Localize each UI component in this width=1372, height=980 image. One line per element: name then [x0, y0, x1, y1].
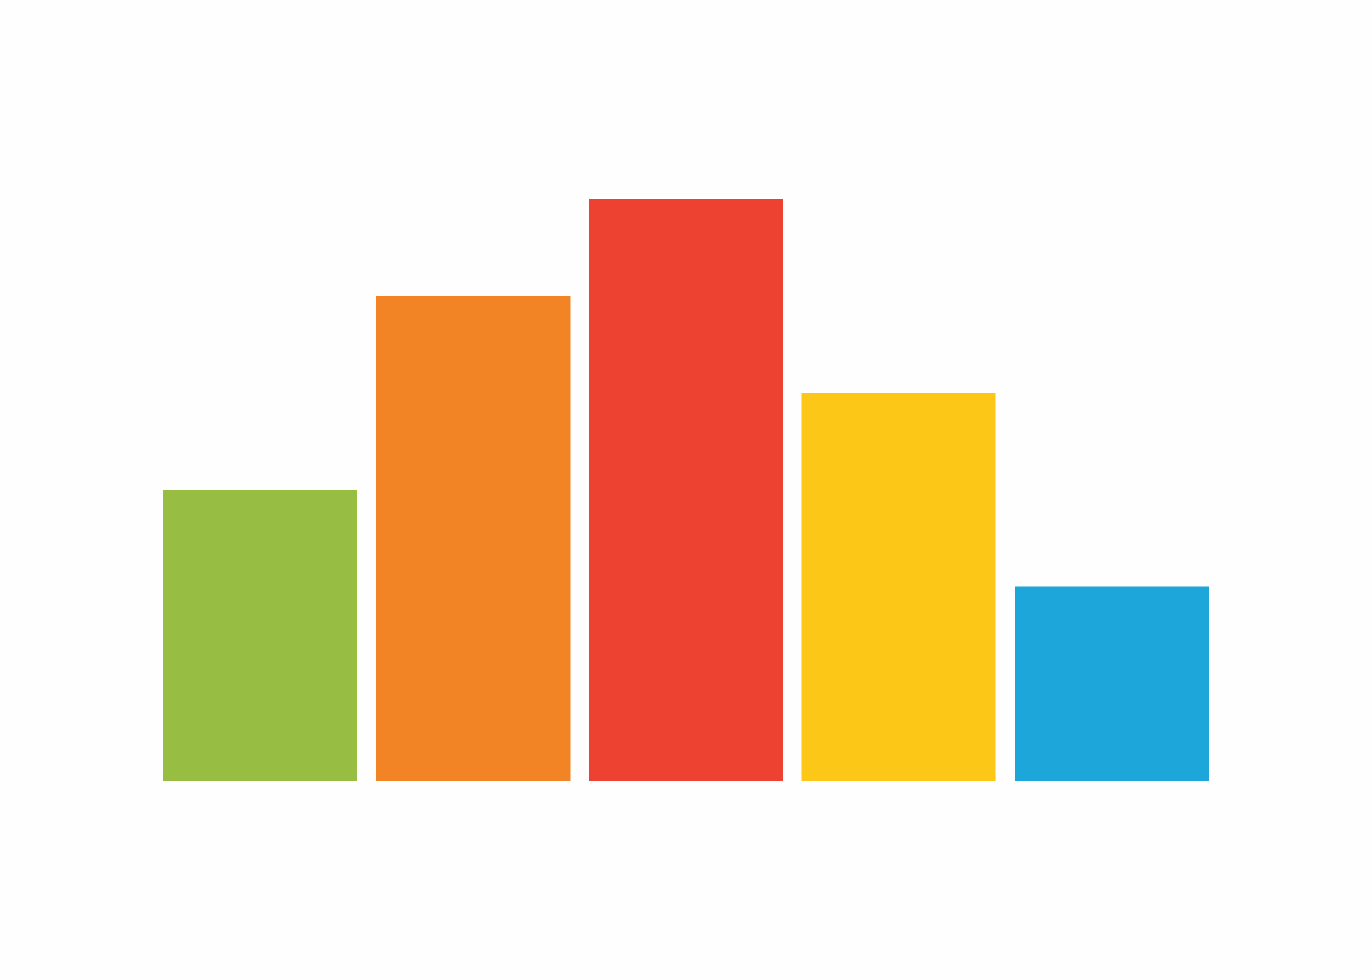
bar: orange: [376, 296, 570, 781]
bar: green: [163, 490, 357, 781]
bar: yellow: [802, 393, 996, 781]
bar: red: [589, 199, 783, 781]
bar: blue: [1015, 586, 1209, 781]
